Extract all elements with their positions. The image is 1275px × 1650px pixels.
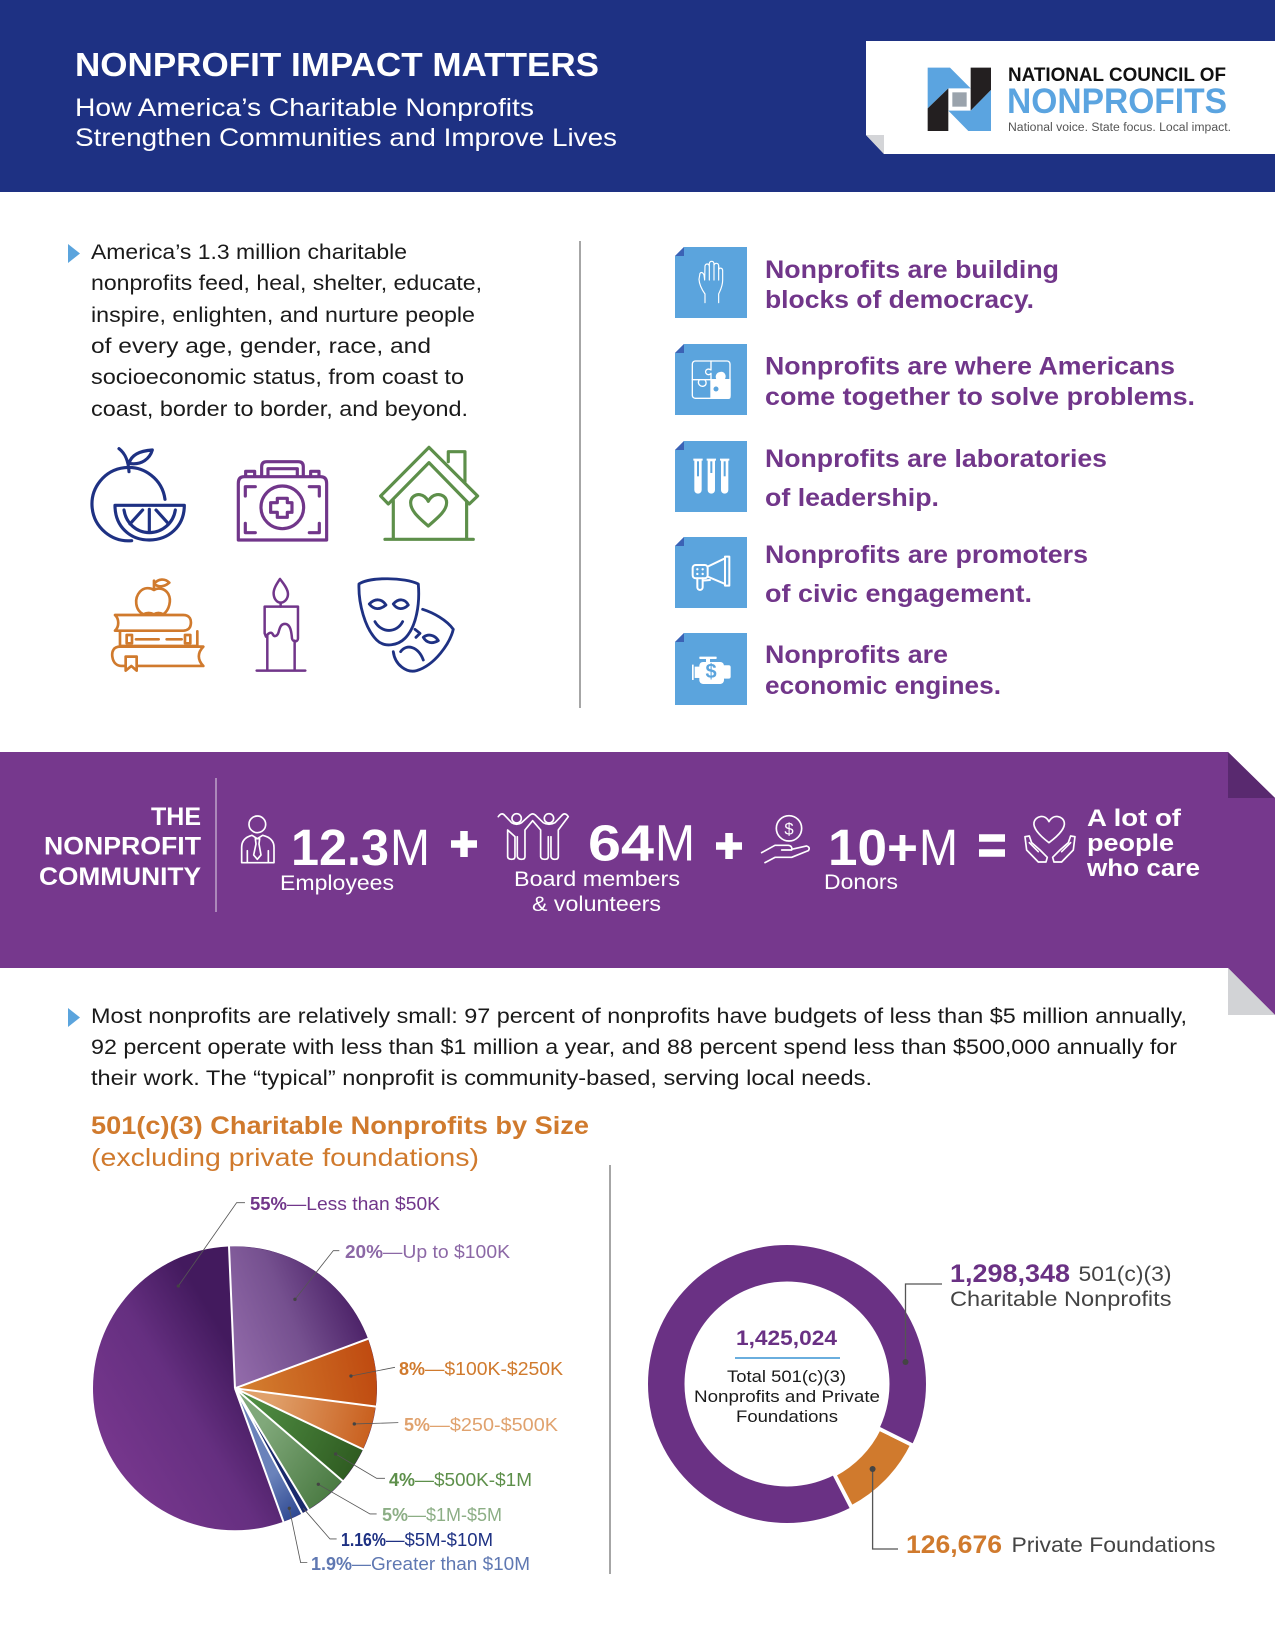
logo wordmark: NONPROFITS (1007, 82, 1227, 121)
intro text block: socioeconomic status, from coast to (91, 366, 464, 389)
stat: board members and volunteers: 64 (588, 814, 655, 872)
chart heading: 501(c)(3) Charitable Nonprofits by Size (91, 1112, 589, 1140)
stat: people who care: who care (1086, 855, 1200, 882)
icon: theatre masks (359, 579, 453, 671)
label: 20%: —Up to $100K (383, 1242, 510, 1262)
text block: most nonprofits are small: 92 percent operate with less than $1 million a year, and 88 percent spend less than $500,000 annually for (91, 1036, 1177, 1059)
title: NONPROFIT IMPACT MATTERS (75, 46, 599, 83)
item: civic engagement: of civic engagement. (765, 580, 1032, 608)
label: 20%: 20% (345, 1242, 383, 1262)
intro text block: nonprofits feed, heal, shelter, educate, (91, 272, 482, 295)
logo wordmark (1007, 65, 1231, 134)
label: 8%: 8% (399, 1359, 425, 1379)
stat: board members and volunteers: & volunteers (532, 893, 661, 916)
callout: private foundations: Private Foundations (1012, 1534, 1216, 1557)
item: laboratories: Nonprofits are laboratories (765, 445, 1107, 473)
item: come together (675, 344, 1195, 415)
item: civic engagement: Nonprofits are promoters (765, 541, 1088, 569)
stat: employees: 12.3 (291, 819, 389, 876)
label: 5%: 5% (404, 1415, 430, 1435)
intro text block (68, 241, 482, 421)
slices (93, 1246, 377, 1530)
chart heading: (excluding private foundations) (91, 1144, 479, 1172)
panel: why nonprofits list (675, 247, 1195, 705)
item: democracy: blocks of democracy. (765, 286, 1034, 314)
purple ribbon: the nonprofit community (0, 752, 1275, 1015)
item: economic engines (675, 633, 1001, 705)
intro text block: of every age, gender, race, and (91, 335, 431, 358)
logo panel (866, 41, 1275, 154)
icon: employee (242, 816, 274, 863)
stat: donors (762, 816, 958, 894)
subtitle (75, 94, 617, 152)
icon: raised hand (675, 247, 747, 318)
community heading: NONPROFIT (44, 832, 201, 860)
label: 1.16% (341, 1530, 493, 1550)
stat: donors: Donors (824, 871, 898, 894)
text block: most nonprofits are small: their work. The “typical” nonprofit is community-based, serving local needs. (91, 1067, 872, 1090)
label: 1.9%: —Greater than $10M (352, 1554, 530, 1574)
donut center text: Foundations (736, 1407, 838, 1426)
logo wordmark: National voice. State focus. Local impact. (1008, 122, 1231, 134)
stat: board members and volunteers: Board members (514, 868, 680, 891)
item: laboratories (675, 441, 1107, 512)
callout: private foundations (906, 1531, 1216, 1559)
pie chart: nonprofits by size (93, 1203, 398, 1563)
label: 5%: —$250-$500K (430, 1415, 558, 1435)
donut center text: Nonprofits and Private (694, 1387, 880, 1406)
stat: people who care: A lot of (1087, 805, 1182, 832)
equals sign (979, 838, 1005, 853)
intro text block: coast, border to border, and beyond. (91, 398, 468, 421)
text block: most nonprofits are small: Most nonprofits are relatively small: 97 percent of nonprofits have budgets of less than $5 million annually, (91, 1005, 1187, 1028)
plus sign (716, 833, 742, 859)
label: 4%: —$500K-$1M (415, 1470, 532, 1490)
donut chart: total nonprofits (666, 1263, 942, 1549)
intro text block: America’s 1.3 million charitable (91, 241, 407, 264)
text block: most nonprofits are small (68, 1005, 1187, 1090)
pie labels (250, 1194, 563, 1574)
item: civic engagement (675, 537, 1088, 608)
label: 1.9%: 1.9% (311, 1554, 352, 1574)
icon: megaphone (675, 537, 747, 608)
icon: test tubes (675, 441, 747, 512)
stat: donors: M (919, 819, 958, 876)
donut center text: Total 501(c)(3) (727, 1367, 846, 1386)
icon: puzzle (675, 344, 747, 415)
header banner (0, 0, 1275, 192)
intro text block: inspire, enlighten, and nurture people (91, 304, 475, 327)
plus sign (451, 831, 477, 857)
label: 5%: —$1M-$5M (408, 1505, 502, 1525)
icon: hands and heart (1025, 816, 1075, 862)
icon: orange (92, 449, 184, 541)
icon group: services (92, 447, 478, 671)
slice separators (229, 1246, 376, 1522)
item: economic engines: economic engines. (765, 672, 1001, 700)
item: come together: Nonprofits are where Americans (765, 352, 1175, 380)
icon: books and apple (112, 580, 203, 671)
arrow bullet (68, 1008, 80, 1027)
community heading: COMMUNITY (39, 863, 201, 891)
vertical divider (579, 241, 581, 708)
chart heading (91, 1112, 589, 1172)
stat: employees: M (390, 819, 430, 876)
icon: engine with dollar (675, 633, 747, 705)
callout: charitable nonprofits: 501(c)(3) (1078, 1263, 1172, 1286)
arrow bullet (68, 244, 80, 263)
label: 1.16%: 1.16% (341, 1530, 386, 1550)
callout lines (873, 1284, 942, 1549)
label: 1.16%: —$5M-$10M (386, 1530, 493, 1550)
donut center text: 1,425,024 (736, 1327, 837, 1350)
icon: hand with coin (762, 816, 809, 863)
stat: donors: 10+ (828, 819, 918, 876)
subtitle: How America’s Charitable Nonprofits (75, 94, 534, 122)
item: democracy: Nonprofits are building (765, 256, 1059, 284)
item: economic engines: Nonprofits are (765, 641, 948, 669)
stat: people who care (1025, 805, 1200, 882)
label: 55%: —Less than $50K (287, 1194, 440, 1214)
item: laboratories: of leadership. (765, 484, 939, 512)
stat: people who care: people (1087, 830, 1174, 857)
logo mark (928, 68, 991, 131)
subtitle: Strengthen Communities and Improve Lives (75, 124, 617, 152)
item: come together: come together to solve problems. (765, 383, 1195, 411)
stat: employees (242, 816, 430, 895)
icon: house with heart (381, 447, 478, 539)
callout: charitable nonprofits: 1,298,348 (950, 1260, 1070, 1288)
icon: hand with coin: $ (784, 819, 794, 838)
leader lines (178, 1203, 398, 1563)
community heading (39, 803, 201, 891)
stat: board members and volunteers (498, 814, 695, 916)
donut center text (694, 1327, 880, 1426)
community heading: THE (151, 803, 201, 831)
logo wordmark: NATIONAL COUNCIL OF (1008, 65, 1226, 86)
icon: medical kit (238, 462, 327, 540)
vertical divider (609, 1165, 611, 1574)
icon: candle (257, 579, 305, 671)
callout: private foundations: 126,676 (906, 1531, 1002, 1559)
callout: charitable nonprofits: Charitable Nonprofits (950, 1288, 1172, 1311)
icon: people with raised arms (498, 814, 568, 859)
stat: board members and volunteers: M (655, 814, 695, 872)
icon: engine with dollar: $ (705, 661, 717, 683)
item: democracy (675, 247, 1059, 318)
callout: charitable nonprofits (950, 1260, 1172, 1311)
label: 4%: 4% (389, 1470, 415, 1490)
label: 8%: —$100K-$250K (425, 1359, 563, 1379)
label: 55%: 55% (250, 1194, 287, 1214)
label: 5%: 5% (382, 1505, 408, 1525)
stat: employees: Employees (280, 872, 394, 895)
